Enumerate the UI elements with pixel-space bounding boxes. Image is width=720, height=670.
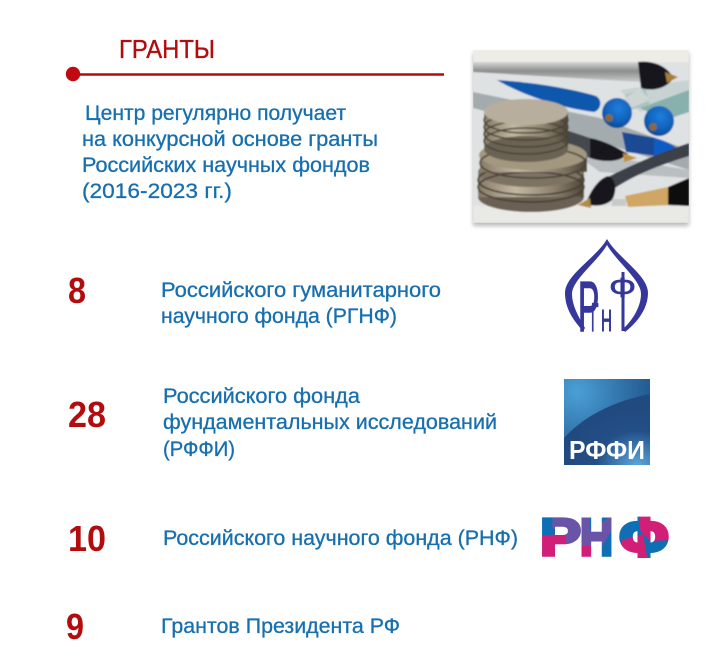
- icon: РГНФ logo: Ф: [609, 272, 636, 303]
- item 3: text: Российского научного фонда (РНФ): [163, 526, 518, 550]
- item 4: number: 9: [66, 606, 84, 647]
- item 2: number: 28: [68, 394, 106, 435]
- icon: РФФИ logo: [564, 379, 650, 465]
- item 3: number: 10: [68, 518, 106, 559]
- icon: РНФ logo: [540, 509, 668, 567]
- lower coin stack: [478, 140, 587, 212]
- item 1: text: научного фонда (РГНФ): [161, 304, 397, 328]
- item 2: text: [163, 384, 497, 461]
- item 1: text: Российского гуманитарного: [161, 278, 441, 302]
- intro text: на конкурсной основе гранты: [82, 127, 378, 151]
- photo: coins and pens: [473, 50, 689, 226]
- icon: РНФ logo: Н: [580, 509, 613, 567]
- intro text: Центр регулярно получает: [85, 101, 346, 125]
- item 1: number: 8: [68, 270, 86, 311]
- item 4: text: Грантов Президента РФ: [161, 614, 400, 638]
- item 2: text: (РФФИ): [163, 437, 235, 461]
- icon: РНФ logo: Р: [540, 509, 581, 567]
- title rule with dot: [66, 67, 444, 81]
- intro text: Российских научных фондов: [82, 153, 370, 177]
- upper coin stack: [484, 99, 568, 162]
- icon: РФФИ logo: РФФИ: [569, 435, 645, 465]
- icon: РНФ logo: Ф: [620, 509, 668, 567]
- intro text: [82, 101, 378, 203]
- item 1: text: [161, 278, 441, 328]
- icon: РГНФ logo: Н: [601, 304, 612, 339]
- item 2: text: фундаментальных исследований: [163, 410, 497, 434]
- item 2: text: Российского фонда: [163, 384, 360, 408]
- intro text: (2016-2023 гг.): [82, 179, 232, 203]
- icon: РГНФ logo: Р: [578, 268, 599, 346]
- icon: РГНФ logo: [565, 239, 648, 346]
- icon: РГНФ logo: Г: [591, 296, 598, 340]
- title: ГРАНТЫ: [119, 34, 215, 64]
